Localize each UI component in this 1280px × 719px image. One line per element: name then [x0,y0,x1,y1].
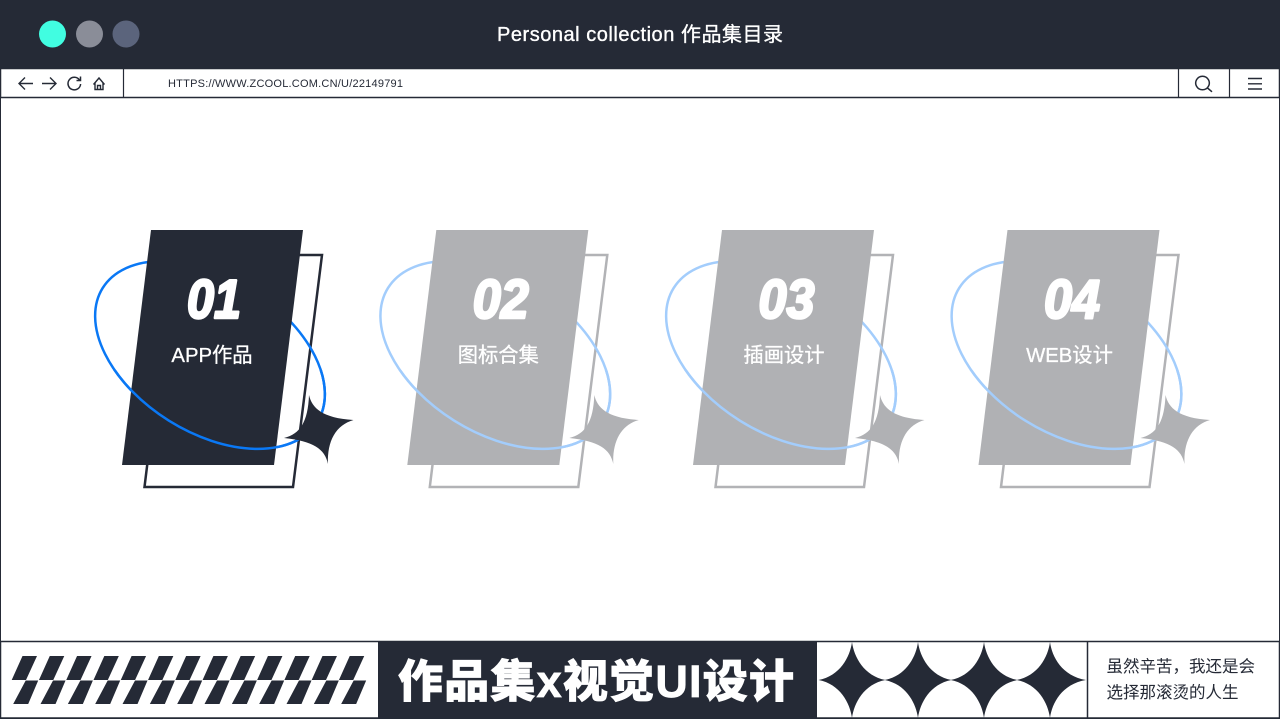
icon: menu [1248,78,1262,89]
orbit front arc [684,370,898,450]
browser toolbar [0,68,1280,98]
window button: cyan [39,20,66,48]
card face [978,230,1160,465]
icon: back arrow [19,78,33,90]
number: 01 [187,268,241,330]
label: WEB设计 [1026,344,1113,367]
slogan text [1106,657,1255,702]
sparkle star [1140,395,1210,464]
label: APP作品 [171,344,253,367]
orbit ellipse [633,222,929,488]
label: 图标合集 [458,344,539,367]
sparkle star [284,395,354,464]
icon: forward arrow [42,78,56,90]
orbit ellipse [347,222,644,488]
page title: Personal collection 作品集目录 [497,23,783,46]
icon: reload [68,76,81,90]
four-point star row [818,642,1086,718]
headline block [378,642,817,718]
checker stripe pattern [12,656,366,704]
orbit front arc [398,370,612,450]
number: 02 [473,268,529,330]
title bar [0,0,1280,69]
card outline [716,255,893,487]
card 03: 插画设计 [664,230,924,488]
orbit ellipse [62,222,358,488]
window button: slate [112,20,140,48]
card 02: 图标合集 [379,230,638,488]
card outline [1001,255,1178,487]
url text: HTTPS://WWW.ZCOOL.COM.CN/U/22149791 [168,78,403,90]
icon: home [94,78,104,90]
orbit front arc [970,370,1183,450]
card 04: WEB设计 [950,230,1210,488]
card face [122,230,303,465]
card face [693,230,874,465]
sparkle star [855,395,924,464]
label: 插画设计 [743,344,825,367]
icon: search [1196,76,1212,92]
slogan text: 虽然辛苦，我还是会 [1106,657,1255,676]
number: 03 [758,268,814,330]
orbit front arc [113,370,326,450]
card 01: APP作品 [94,230,354,488]
orbit ellipse [918,222,1215,488]
headline: 作品集x视觉UI设计 [398,656,794,707]
card outline [144,255,322,487]
bottom banner [0,642,1280,718]
card face [407,230,588,465]
window button: grey [76,20,103,48]
slogan text: 选择那滚烫的人生 [1106,683,1238,702]
sparkle star [569,395,639,464]
card outline [430,255,607,487]
number: 04 [1044,268,1100,330]
